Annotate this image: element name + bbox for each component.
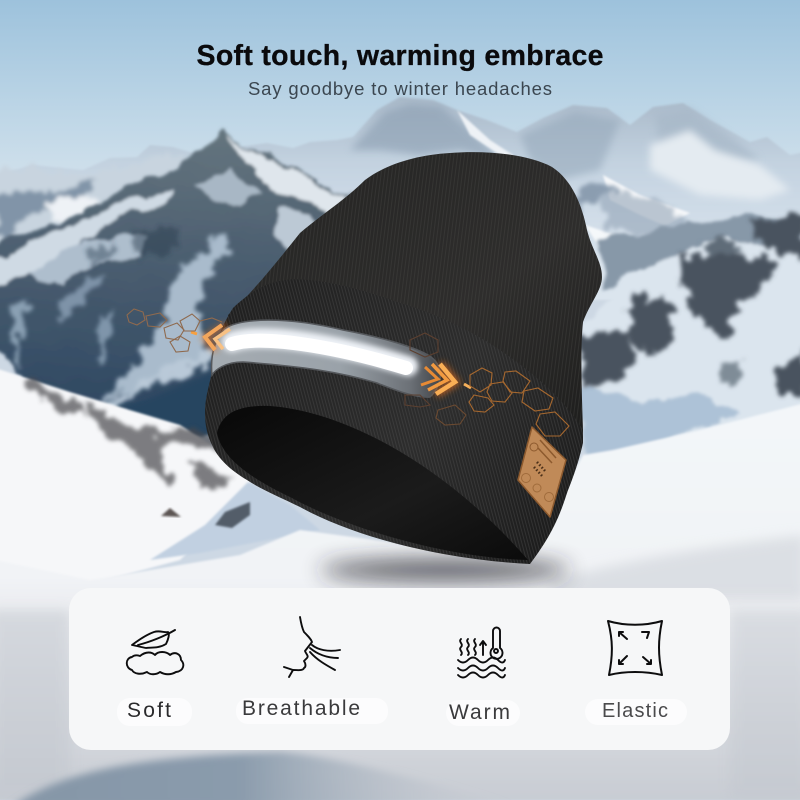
left hexagon pattern: [127, 309, 222, 352]
lower valley: [95, 372, 214, 435]
hat inner opening: [217, 406, 528, 560]
label: soft: Soft: [127, 699, 171, 722]
hat crown: [228, 152, 602, 430]
feature: warm: [446, 628, 520, 726]
label: breathable: Breathable: [242, 697, 360, 720]
rock on snow: [161, 508, 181, 517]
feature: elastic: [585, 621, 687, 725]
big central-left mountain: [0, 128, 347, 435]
dark rocks on right mountain: [580, 215, 800, 395]
rock on mound: [215, 502, 250, 528]
leather patch: [518, 427, 566, 517]
far mountain range: [0, 97, 800, 300]
icon: face breathing: [284, 617, 340, 677]
far left snowy peaks: [0, 155, 690, 270]
label: elastic: Elastic: [602, 700, 668, 722]
sky background: [0, 0, 800, 240]
left foreground slope and rocks: [0, 368, 320, 610]
right rocky mountain: [570, 210, 800, 465]
left orange chevrons: [191, 325, 230, 350]
label: warm: Warm: [449, 701, 510, 724]
label: breathable: [236, 697, 388, 724]
snow streaks on big mountain: [10, 225, 232, 415]
feature: breathable: [236, 617, 388, 724]
snowy foreground: [0, 403, 800, 800]
title: Soft touch, warming embrace: [196, 40, 604, 72]
icon: stretching pillow: [608, 621, 662, 675]
icon: feather over cloud: [127, 630, 183, 674]
panel background: [69, 588, 730, 750]
subtitle: Say goodbye to winter headaches: [248, 78, 552, 99]
beanie hat: [127, 152, 602, 564]
blue shaded snow mound: [150, 482, 320, 560]
hat cuff: [205, 279, 583, 564]
bottom snow shading: [10, 752, 520, 800]
icon: heat waves and thermometer: [458, 628, 505, 678]
feature panel: [69, 588, 730, 750]
feature: soft: [117, 630, 192, 726]
hat shadow on snow: [320, 559, 570, 581]
right hexagon pattern: [405, 333, 569, 436]
right orange chevrons: [421, 364, 471, 394]
led light strip: [212, 320, 440, 397]
